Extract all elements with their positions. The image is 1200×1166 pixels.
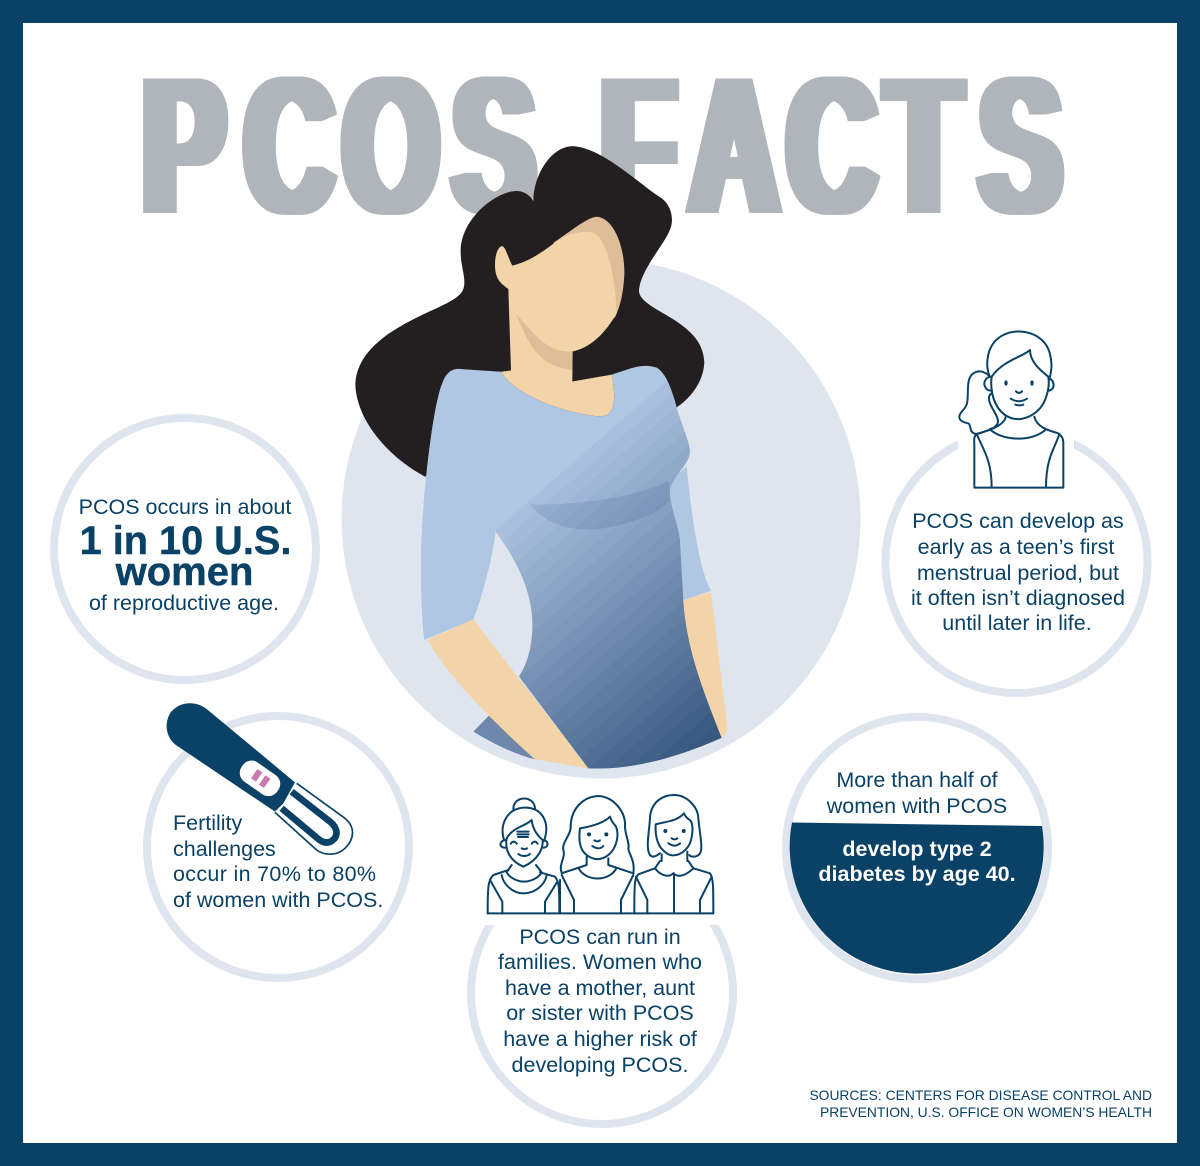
panel: diabetes: develop type 2 bbox=[842, 837, 992, 861]
right arm bbox=[683, 592, 728, 738]
panel: families: PCOS can run in bbox=[519, 925, 681, 949]
shirt bbox=[421, 366, 722, 769]
left sleeve bbox=[421, 385, 497, 640]
panel: teen: until later in life. bbox=[942, 611, 1092, 635]
panel: families: have a mother, aunt bbox=[505, 976, 695, 1000]
title: PCOS FACTS bbox=[143, 38, 1061, 254]
panel: 1 in 10 bbox=[54, 418, 316, 680]
skin: neck and chest bbox=[501, 289, 614, 416]
panel: families: developing PCOS. bbox=[512, 1053, 688, 1077]
left arm bbox=[427, 619, 588, 768]
panel: teen bbox=[886, 325, 1148, 693]
panel: families: have a higher risk of bbox=[503, 1027, 697, 1051]
face shadow bbox=[553, 217, 624, 317]
panel: diabetes: More than half of bbox=[836, 768, 998, 792]
shirt hem bbox=[473, 714, 535, 759]
icon: teen girl bbox=[959, 331, 1063, 488]
panel: fertility: occur in 70% to 80% bbox=[173, 862, 376, 886]
face bbox=[495, 232, 617, 352]
panel: 1 in 10: of reproductive age. bbox=[89, 591, 279, 615]
sources: SOURCES: CENTERS FOR DISEASE CONTROL AND bbox=[809, 1087, 1152, 1103]
panel: fertility: of women with PCOS. bbox=[173, 888, 383, 912]
panel: teen: menstrual period, but bbox=[917, 561, 1119, 585]
panel: families: families. Women who bbox=[498, 950, 702, 974]
background circle bbox=[342, 260, 860, 778]
right sleeve bbox=[670, 466, 711, 600]
panel: 1 in 10: PCOS occurs in about bbox=[79, 495, 291, 519]
neck shadow bbox=[516, 313, 573, 370]
shirt fold bbox=[530, 481, 670, 530]
panel: families: or sister with PCOS bbox=[506, 1001, 694, 1025]
panel: 1 in 10: women bbox=[115, 550, 253, 594]
panel: teen: early as a teen’s first bbox=[918, 535, 1114, 559]
panel: diabetes: diabetes by age 40. bbox=[818, 862, 1016, 886]
big stat: 1 in 10 U.S. bbox=[80, 519, 291, 563]
sources bbox=[809, 1087, 1152, 1120]
icon: three women bbox=[488, 795, 713, 913]
icon: pregnancy test bbox=[167, 703, 352, 854]
panel: fertility: Fertility bbox=[173, 811, 243, 835]
panel: fertility bbox=[147, 703, 409, 978]
panel: diabetes: women with PCOS bbox=[826, 794, 1007, 818]
woman illustration bbox=[355, 146, 728, 769]
panel: fertility: challenges bbox=[173, 837, 276, 861]
hair bbox=[355, 146, 704, 477]
panel: teen: it often isn’t diagnosed bbox=[911, 586, 1125, 610]
sources: PREVENTION, U.S. OFFICE ON WOMEN’S HEALTH bbox=[820, 1104, 1152, 1120]
half-filled circle bbox=[790, 822, 1044, 974]
panel: families bbox=[465, 795, 740, 1124]
panel: diabetes bbox=[786, 717, 1048, 979]
panel: teen: PCOS can develop as bbox=[912, 509, 1124, 533]
